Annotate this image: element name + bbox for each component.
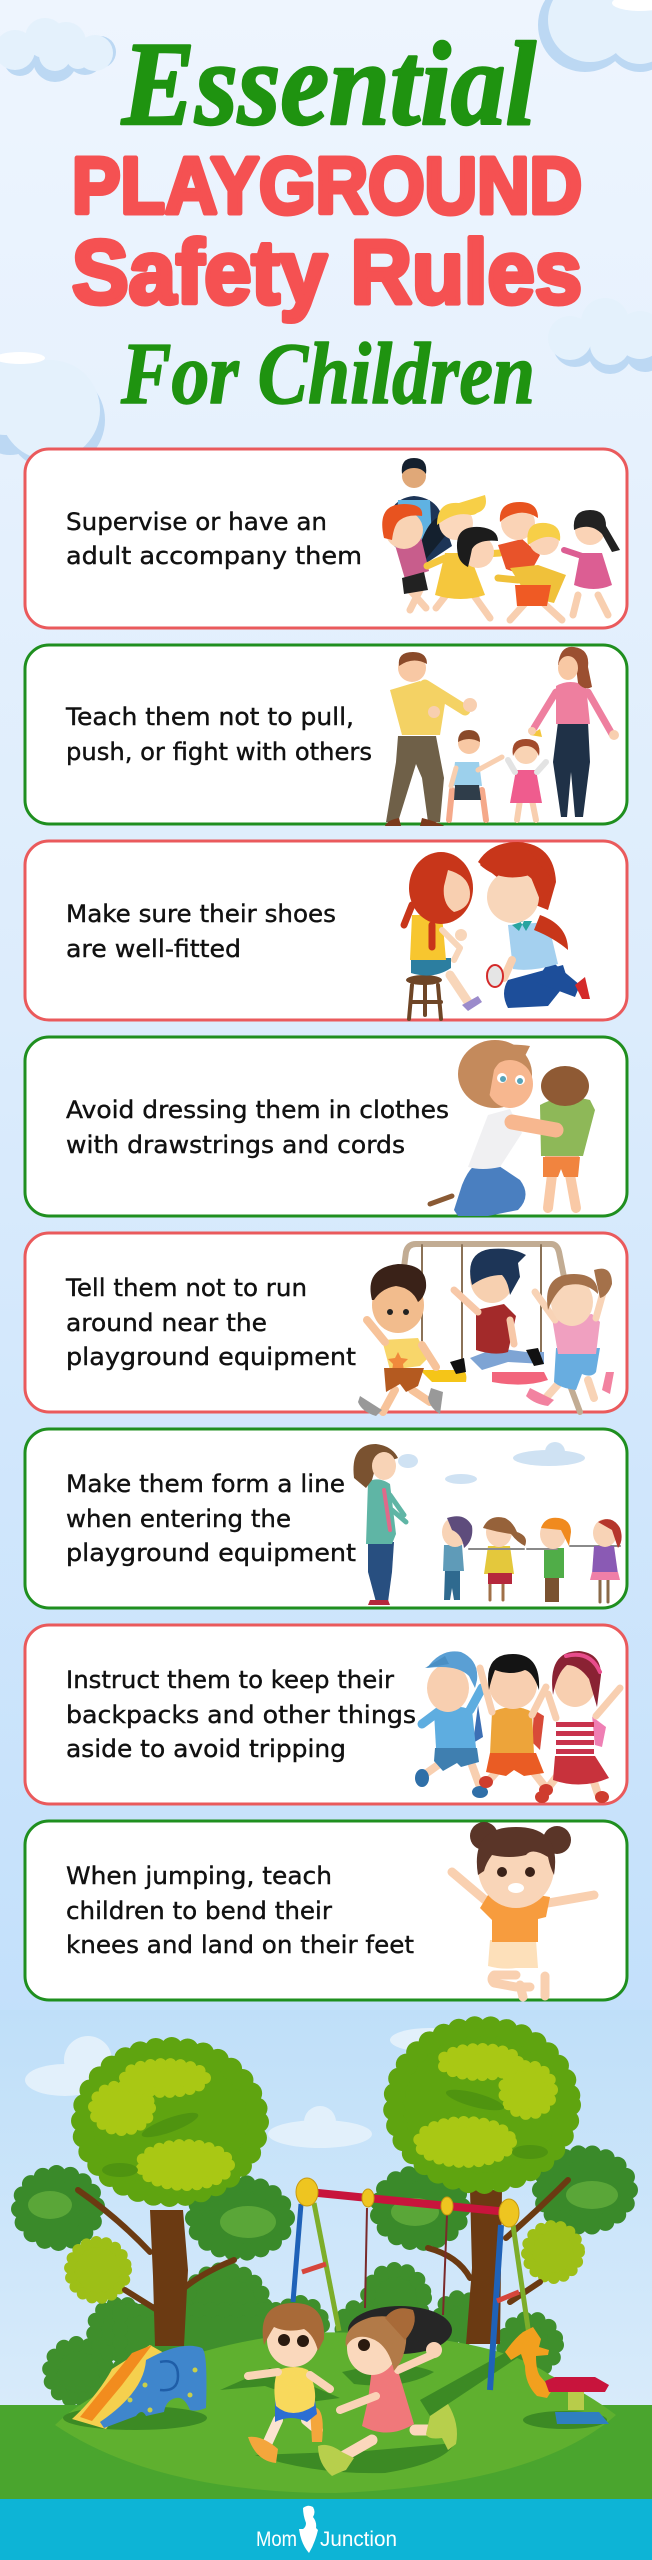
boy running [248,2303,330,2463]
back tree canopies [20,2154,629,2252]
back tree highlights [28,2181,618,2238]
tree trunks [78,2180,568,2346]
logo wordmark [256,2528,397,2551]
title line: Safety Rules: Safety Rules [72,223,582,323]
rule text [66,1862,414,1959]
scene: playground [0,2010,652,2500]
logo wordmark: Mom [256,2528,297,2551]
panel: clothes [25,1037,627,1216]
rule text: playground equipment [66,1343,356,1371]
illustration: jumping girl [452,1822,594,1997]
panel: no fighting [25,645,627,826]
panel: jumping [25,1821,627,2000]
rule text: adult accompany them [66,542,362,570]
footer band [0,2499,652,2560]
title line: Essential: Essential [121,17,537,150]
grass hill [55,2332,616,2493]
rule text: playground equipment [66,1539,356,1567]
illustration: parents and children [385,647,619,826]
rule text: around near the [66,1309,267,1337]
rule text: knees and land on their feet [66,1931,414,1959]
rule text: Supervise or have an [66,508,327,536]
left tree crown [82,2048,258,2196]
elephant slide [72,2345,206,2429]
illustration: adult with running children [382,458,620,620]
rule text: When jumping, teach [66,1862,332,1890]
title [72,17,582,423]
rocking horse [505,2327,609,2424]
title line: For Children: For Children [120,326,535,423]
cloud: top right [538,0,652,72]
card frame [25,449,627,628]
cloud: bottom left [0,352,105,470]
rule text: are well-fitted [66,935,241,963]
title line: PLAYGROUND: PLAYGROUND [72,141,582,230]
rule text [66,508,362,570]
panel: supervise [25,449,627,628]
background bushes [50,2270,556,2400]
card frame [25,645,627,824]
rule text [66,900,336,963]
illustration: mother fitting shoe [404,842,590,1019]
rule text: when entering the [66,1505,291,1533]
rule text: Teach them not to pull, [65,703,354,731]
illustration: teacher and children in line [353,1442,622,1605]
rule text: push, or fight with others [66,738,372,766]
rule text [66,1470,356,1567]
panel: no running [25,1233,627,1416]
rule text [65,703,372,766]
scene clouds [25,2028,470,2148]
grass ground [0,2405,652,2500]
girl running [318,2308,457,2476]
illustration: children running near swing [358,1244,614,1416]
card frame [25,1233,627,1412]
logo mark [299,2506,318,2553]
panel: backpacks [25,1625,627,1804]
sky [0,2010,652,2410]
panel: form a line [25,1429,627,1608]
card frame [25,1429,627,1608]
swing set [293,2178,529,2390]
panel: shoes [25,841,627,1020]
rule text: with drawstrings and cords [66,1131,405,1159]
cloud: top left [0,18,116,82]
rule text: Make sure their shoes [66,900,336,928]
rule text: Instruct them to keep their [66,1666,394,1694]
rule text: Make them form a line [66,1470,345,1498]
illustration: mother and child changing [430,1040,595,1216]
ground shadows [63,2350,607,2473]
card frame [25,1821,627,2000]
rule text: aside to avoid tripping [66,1735,346,1763]
rule text: Avoid dressing them in clothes [66,1096,449,1124]
card frame [25,1625,627,1804]
cloud: middle right [548,298,652,374]
rule text: children to bend their [66,1897,332,1925]
small lime bushes [70,2226,579,2298]
background [0,0,652,2020]
right tree crown [394,2027,570,2183]
rule text: Tell them not to run [65,1274,307,1302]
logo wordmark: Junction [320,2528,397,2551]
card frame [25,1037,627,1216]
rule text [66,1666,416,1763]
illustration: three children with backpacks [415,1651,620,1803]
rule text [66,1096,449,1159]
rule text: backpacks and other things [66,1701,416,1729]
rule text [65,1274,356,1371]
card frame [25,841,627,1020]
